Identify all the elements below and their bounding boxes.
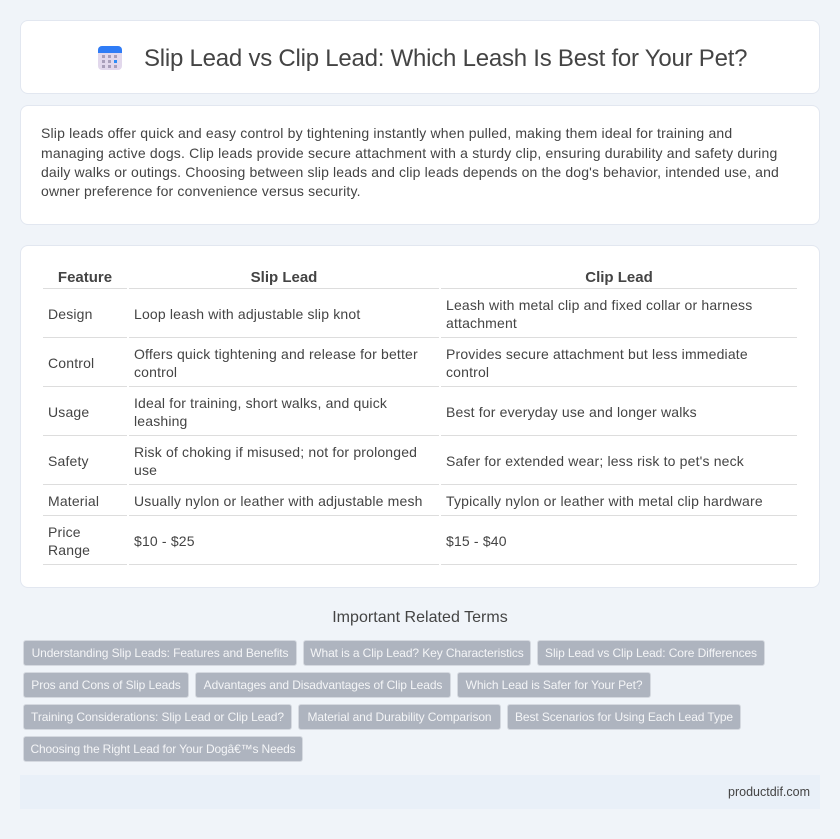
tag xyxy=(23,640,297,666)
table row: Material: Material xyxy=(48,493,99,509)
tag xyxy=(457,672,651,698)
table row: Price Range: $15 - $40 xyxy=(446,533,507,549)
tag: What is a Clip Lead? Key Characteristics xyxy=(310,646,524,660)
table row: Material: Typically nylon or leather with metal clip hardware xyxy=(446,493,763,509)
tag: Pros and Cons of Slip Leads xyxy=(31,678,181,692)
tag: Advantages and Disadvantages of Clip Leads xyxy=(204,678,442,692)
tag: Which Lead is Safer for Your Pet? xyxy=(466,678,642,692)
tag xyxy=(195,672,451,698)
table row: Control: control xyxy=(446,364,489,380)
tag cloud: related terms xyxy=(23,640,765,762)
tag: Material and Durability Comparison xyxy=(307,710,492,724)
table row: Design: attachment xyxy=(446,315,517,331)
tag xyxy=(23,736,303,762)
tag xyxy=(537,640,765,666)
text: introduction paragraph xyxy=(41,125,779,199)
table row: Usage: Ideal for training, short walks, and quick xyxy=(134,395,387,411)
title: Slip Lead vs Clip Lead: Which Leash Is Best for Your Pet? xyxy=(144,45,747,72)
table row: Usage: Best for everyday use and longer walks xyxy=(446,404,697,420)
table row: Control: control xyxy=(134,364,177,380)
table row: Safety: Safety xyxy=(48,453,89,469)
table row: Price Range xyxy=(43,524,797,565)
table header row xyxy=(43,269,797,289)
table row: Design: Loop leash with adjustable slip knot xyxy=(134,306,360,322)
tag xyxy=(23,672,189,698)
tag xyxy=(303,640,531,666)
panel: header xyxy=(20,20,820,94)
table row: Control: Provides secure attachment but less immediate xyxy=(446,346,748,362)
table row: Safety: Risk of choking if misused; not for prolonged xyxy=(134,444,417,460)
table row: Safety: use xyxy=(134,462,157,478)
table row: Control: Control xyxy=(48,355,94,371)
panel: comparison table xyxy=(20,245,820,588)
table row: Design: Leash with metal clip and fixed collar or harness xyxy=(446,297,752,313)
tag: Understanding Slip Leads: Features and Benefits xyxy=(32,646,288,660)
table row: Safety: Safer for extended wear; less risk to pet's neck xyxy=(446,453,744,469)
table row: Design xyxy=(43,297,797,338)
table row: Safety xyxy=(43,444,797,485)
table header row: Feature xyxy=(58,269,112,286)
text: introduction paragraph: managing active dogs. Clip leads provide secure attachment with a sturdy clip, ensuring durability and safety during xyxy=(41,145,777,161)
table row: Price Range: $10 - $25 xyxy=(134,533,195,549)
tag xyxy=(298,704,501,730)
table row: Control xyxy=(43,346,797,387)
table row: Design: Design xyxy=(48,306,93,322)
table row: Usage: leashing xyxy=(134,413,188,429)
table row: Material xyxy=(43,493,797,516)
heading: related terms: Important Related Terms xyxy=(332,609,508,626)
tag: Choosing the Right Lead for Your Dogâ€™s Needs xyxy=(30,742,296,756)
icon: calendar xyxy=(98,46,122,70)
table row: Usage xyxy=(43,395,797,436)
table row: Control: Offers quick tightening and release for better xyxy=(134,346,418,362)
table row: Price Range: Price xyxy=(48,524,81,540)
footer xyxy=(20,775,820,809)
tag: Best Scenarios for Using Each Lead Type xyxy=(515,710,733,724)
panel: introduction xyxy=(20,105,820,225)
tag: Slip Lead vs Clip Lead: Core Differences xyxy=(545,646,757,660)
table header row: Slip Lead xyxy=(251,269,317,286)
tag: Training Considerations: Slip Lead or Clip Lead? xyxy=(31,710,284,724)
footer: site name: productdif.com xyxy=(728,785,810,799)
tag xyxy=(23,704,292,730)
table row: Price Range: Range xyxy=(48,542,90,558)
table row: Usage: Usage xyxy=(48,404,89,420)
text: introduction paragraph: Slip leads offer quick and easy control by tightening instantly when pulled, making them ideal for training and xyxy=(41,125,732,141)
tag xyxy=(507,704,741,730)
text: introduction paragraph: daily walks or outings. Choosing between slip leads and clip leads depends on the dog's behavior, intended use, and xyxy=(41,164,779,180)
table header row: Clip Lead xyxy=(585,269,653,286)
text: introduction paragraph: owner preference for convenience versus security. xyxy=(41,183,361,199)
table row: Material: Usually nylon or leather with adjustable mesh xyxy=(134,493,423,509)
